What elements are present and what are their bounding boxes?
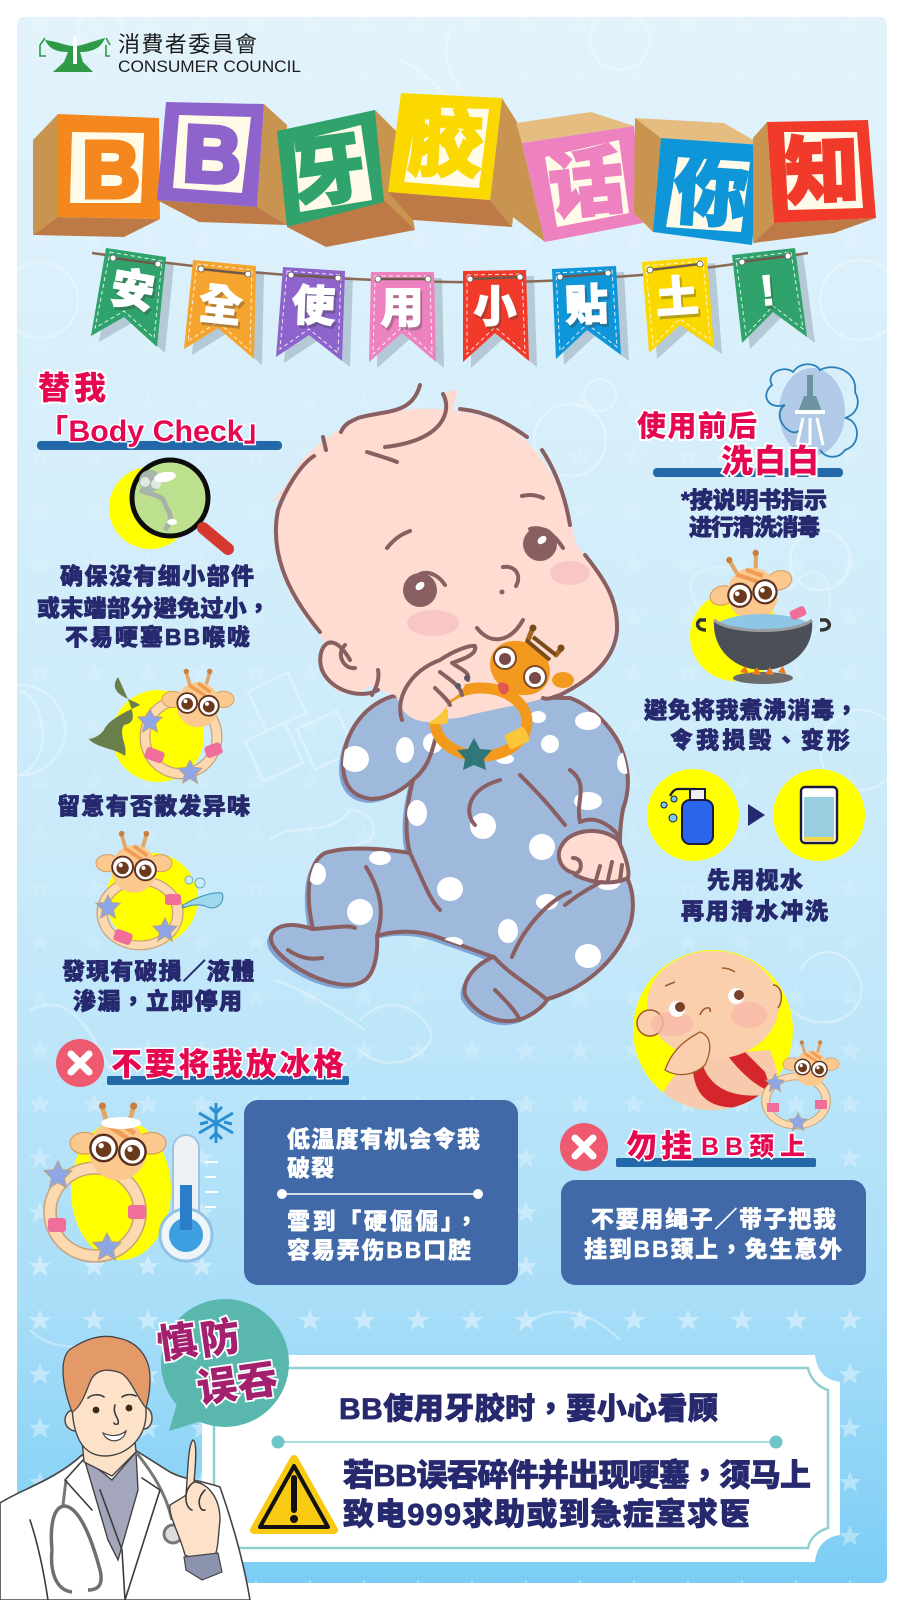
block 你 blue: 你 <box>671 150 751 238</box>
panel: no strings <box>561 1180 866 1285</box>
subtitle: bunting flags: 贴 <box>564 281 609 331</box>
baby fist <box>559 831 629 883</box>
text: follow manual: *按说明书指示 <box>681 487 827 513</box>
icon: giraffe with odour <box>88 669 234 783</box>
card: swallowing warning: 若BB误吞碎件并出现哽塞，须马上 <box>343 1458 811 1493</box>
text: do not boil: 令我损毁、变形 <box>670 727 850 753</box>
panel: no strings: 不要用绳子／带子把我 <box>591 1206 836 1232</box>
baby head <box>270 385 617 719</box>
subtitle: bunting flags: 使 <box>291 282 336 332</box>
baby hand near mouth <box>398 645 478 722</box>
heading: not around the neck: BB颈上 <box>701 1133 805 1161</box>
card: swallowing warning: BB使用牙胶时，要小心看顾 <box>339 1393 718 1426</box>
block B purple <box>157 102 287 225</box>
text: follow manual: 进行清洗消毒 <box>689 514 820 540</box>
panel: no strings: 挂到BB颈上，免生意外 <box>584 1236 842 1262</box>
icon: baby with ribbon <box>633 950 839 1131</box>
heading: do not freeze: 不要将我放冰格 <box>111 1047 344 1082</box>
block 知 red <box>753 120 876 243</box>
speech bubble: guard against swallowing: 防 <box>197 1315 243 1364</box>
subtitle: bunting flags: 安 <box>107 264 158 319</box>
icon: frozen giraffe and thermometer <box>44 1102 233 1261</box>
doctor character <box>0 1336 250 1600</box>
block 牙 green: 牙 <box>286 126 371 218</box>
block 牙 green <box>277 110 415 247</box>
card: swallowing warning <box>202 1355 840 1562</box>
icon: shower with foam <box>766 364 858 457</box>
subtitle: bunting flags: 用 <box>380 285 424 333</box>
text: check small parts: 不易哽塞BB喉咙 <box>65 624 250 650</box>
block 你 blue <box>634 118 762 245</box>
logo: Consumer Council <box>40 32 301 76</box>
heading: Body Check: 替我 <box>38 370 106 406</box>
text: soap then rinse: 先用枧水 <box>707 867 803 893</box>
subtitle: bunting flags: 全 <box>197 280 244 332</box>
logo: Consumer Council: CONSUMER COUNCIL <box>118 57 301 76</box>
text: damage or leak: 滲漏，立即停用 <box>73 988 242 1014</box>
text: damage or leak <box>62 958 254 1014</box>
panel: low temperature warning: 容易弄伤BB口腔 <box>287 1237 471 1263</box>
icon: giraffe leaking <box>96 831 223 946</box>
panel: low temperature warning: 破裂 <box>287 1155 334 1181</box>
block 话 pink <box>513 112 643 242</box>
logo: Consumer Council: 消費者委員會 <box>118 32 257 57</box>
heading: wash before and after use: 洗白白 <box>721 443 819 479</box>
subtitle: bunting flags: 小 <box>474 284 516 332</box>
text: check small parts: 或末端部分避免过小， <box>37 595 270 621</box>
text: check odour: 留意有否散发异味 <box>57 793 250 819</box>
heading: Body Check: 「Body Check」 <box>38 415 274 448</box>
text: do not boil <box>644 697 858 753</box>
text: follow manual <box>681 487 827 540</box>
main illustration: baby with teether <box>267 385 633 1025</box>
title: toy blocks <box>33 93 876 247</box>
text: check small parts <box>37 563 270 650</box>
block 话 pink: 话 <box>545 138 627 229</box>
heading: not around the neck <box>560 1123 816 1171</box>
text: do not boil: 避免将我煮沸消毒， <box>644 697 858 723</box>
subtitle: bunting flags: 土 <box>654 273 700 323</box>
panel: low temperature warning: 雪到「硬倔倔」， <box>287 1208 478 1234</box>
teether ring <box>428 624 574 770</box>
subtitle: bunting flags: ! <box>758 266 777 316</box>
block B purple: B <box>181 109 244 200</box>
heading: do not freeze <box>56 1039 349 1087</box>
block 知 red: 知 <box>784 129 861 214</box>
speech bubble: guard against swallowing: 误 <box>194 1363 240 1412</box>
heading: wash before and after use: 使用前后 <box>637 410 757 443</box>
card: swallowing warning: 致电999求助或到急症室求医 <box>343 1497 750 1532</box>
heading: not around the neck: 勿挂 <box>626 1129 692 1164</box>
heading: Body Check <box>37 370 282 450</box>
panel: low temperature warning: 低温度有机会令我 <box>287 1126 480 1152</box>
speech bubble: guard against swallowing: 吞 <box>234 1358 280 1407</box>
block B orange: B <box>82 125 140 214</box>
block 胶 yellow: 胶 <box>406 101 484 188</box>
text: damage or leak: 發現有破損／液體 <box>62 958 254 984</box>
block B orange <box>33 114 160 237</box>
icon: soap then water <box>647 769 865 861</box>
speech bubble: guard against swallowing: 慎 <box>154 1319 200 1368</box>
icon: warning triangle <box>254 1459 334 1530</box>
text: soap then rinse: 再用清水冲洗 <box>681 898 828 924</box>
icon: magnifier over giraffe <box>109 460 228 549</box>
text: check small parts: 确保没有细小部件 <box>60 563 254 589</box>
icon: giraffe in boiling pot <box>690 543 829 684</box>
heading: wash before and after use <box>637 364 858 479</box>
speech bubble: guard against swallowing <box>154 1299 289 1431</box>
block 胶 yellow <box>388 93 522 227</box>
panel: low temperature warning <box>244 1100 518 1285</box>
text: soap then rinse <box>681 867 828 924</box>
subtitle: bunting flags <box>91 248 815 368</box>
baby body suit <box>267 696 633 1025</box>
